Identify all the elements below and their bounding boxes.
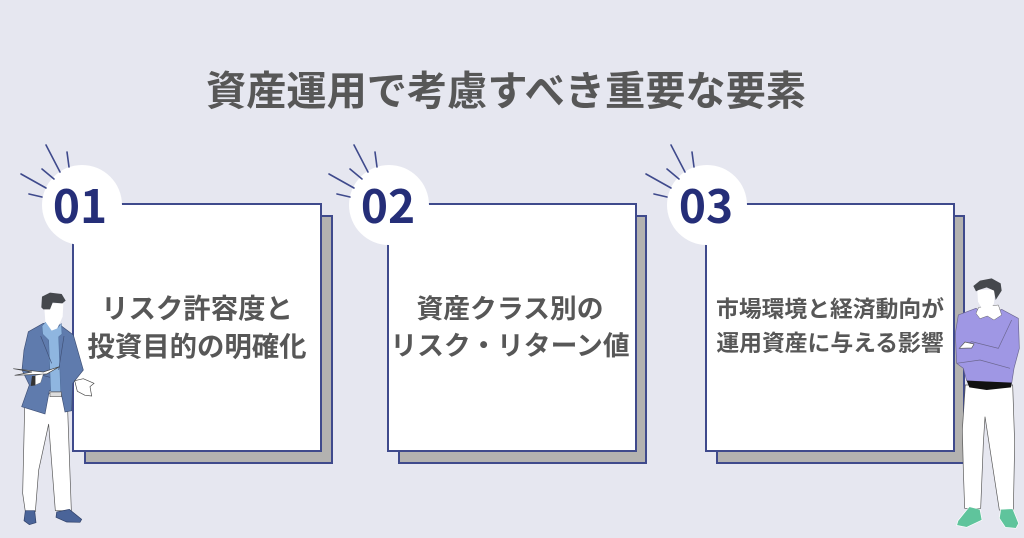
- card 2 number badge: [349, 165, 429, 245]
- shoes: [24, 509, 82, 525]
- title: 資産運用で考慮すべき重要な要素: [206, 58, 806, 117]
- panel: card 1: [20, 144, 333, 464]
- card 2 body: [387, 203, 637, 452]
- cuff and hand: [31, 376, 36, 386]
- card 3 text: 市場環境と経済動向が: [716, 291, 944, 324]
- icon: man in purple sweater: [955, 278, 1020, 528]
- card 1 text: 投資目的の明確化: [87, 324, 307, 364]
- card 3 rays: [645, 144, 695, 198]
- lapel lines: [23, 336, 64, 377]
- jacket: [22, 323, 83, 414]
- icon: man in blue jacket: [13, 292, 94, 525]
- card 3 number badge: [667, 165, 747, 245]
- hair: [973, 278, 1002, 300]
- card 2 number: 02: [361, 171, 415, 237]
- card 2 shadow: [398, 215, 647, 464]
- shoes: [957, 507, 1019, 528]
- card 1 number badge: [42, 165, 122, 245]
- card 1 rays: [20, 144, 70, 198]
- card 3 text: 運用資産に与える影響: [716, 325, 944, 358]
- card 2 text: [390, 287, 630, 363]
- open hand: [75, 379, 94, 396]
- card 2 text: 資産クラス別の: [416, 287, 604, 326]
- card 3 text: [716, 291, 944, 358]
- sweater: [955, 308, 1019, 383]
- neck and face: [44, 303, 63, 331]
- card 2 text: リスク・リターン値: [390, 324, 630, 363]
- belt: [967, 381, 1012, 390]
- paper and pen: [13, 367, 59, 375]
- card 1 number: 01: [53, 171, 107, 237]
- pants: [23, 393, 71, 512]
- collar: [976, 305, 1002, 320]
- card 1 body: [72, 203, 322, 452]
- panel: card 2: [328, 144, 647, 464]
- card 1 text: リスク許容度と: [101, 286, 293, 326]
- crossed arms: [957, 320, 1012, 368]
- panel: card 3: [645, 144, 965, 464]
- card 1 shadow: [84, 215, 333, 464]
- hair: [41, 293, 66, 309]
- card 3 shadow: [716, 215, 965, 464]
- card 3 number: 03: [679, 171, 733, 237]
- shirt: [42, 322, 62, 391]
- card 3 body: [705, 203, 955, 452]
- pants: [962, 385, 1015, 511]
- belt: [50, 392, 61, 397]
- card 1 text: [87, 286, 307, 364]
- face: [977, 289, 995, 311]
- card 2 rays: [328, 144, 378, 198]
